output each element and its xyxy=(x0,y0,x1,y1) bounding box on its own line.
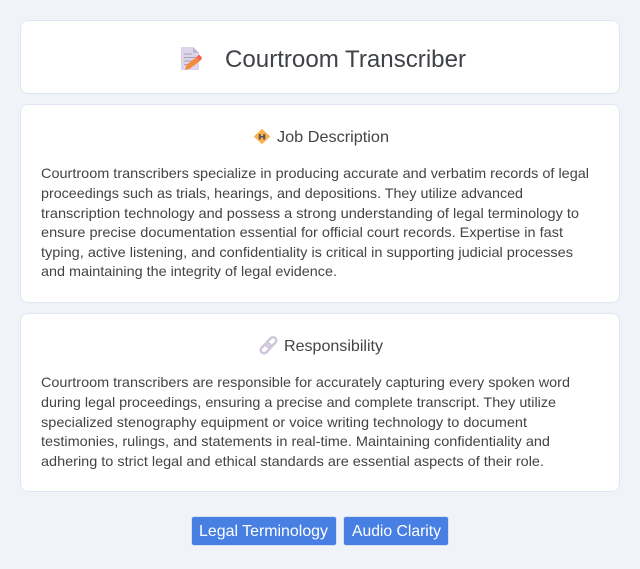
text block: responsibility: during legal proceedings, ensuring a precise and complete transcript. They utilize xyxy=(41,394,556,410)
heading: responsibility: Responsibility xyxy=(284,338,383,355)
panel: responsibility xyxy=(20,313,620,492)
icon: document with pencil xyxy=(181,47,202,70)
text block: job description xyxy=(41,165,589,279)
text block: job description: typing, active listening, and confidentiality is critical in supporting judicial processes xyxy=(41,244,573,260)
text block: job description: and maintaining the integrity of legal evidence. xyxy=(41,263,337,279)
tag: legal terminology: Legal Terminology xyxy=(199,523,328,540)
text block: responsibility: adhering to strict legal and ethical standards are essential aspects of their role. xyxy=(41,453,544,469)
icon: chain link xyxy=(259,336,278,355)
text block: responsibility xyxy=(41,374,570,469)
heading: job description: Job Description xyxy=(277,129,389,146)
text block: responsibility: specialized stenography equipment or voice writing technology to document xyxy=(41,414,527,430)
text block: job description: transcription technology and possess a strong understanding of legal terminology to xyxy=(41,205,579,221)
icon: diamond road sign xyxy=(254,130,270,144)
text block: responsibility: Courtroom transcribers are responsible for accurately capturing every spoken word xyxy=(41,374,570,390)
panel: title card xyxy=(20,20,620,94)
tag: audio clarity: Audio Clarity xyxy=(352,523,441,540)
text block: job description: Courtroom transcribers specialize in producing accurate and verbatim records of legal xyxy=(41,165,589,181)
text block: job description: ensure precise documentation essential for official court records. Expertise in fast xyxy=(41,224,563,240)
tag: audio clarity xyxy=(343,516,449,546)
title: Courtroom Transcriber xyxy=(225,46,466,73)
text block: job description: proceedings such as trials, hearings, and depositions. They utilize advanced xyxy=(41,185,523,201)
text block: responsibility: testimonies, rulings, and statements in real-time. Maintaining confidentiality and xyxy=(41,433,550,449)
tag: legal terminology xyxy=(191,516,337,546)
panel: job description xyxy=(20,104,620,303)
